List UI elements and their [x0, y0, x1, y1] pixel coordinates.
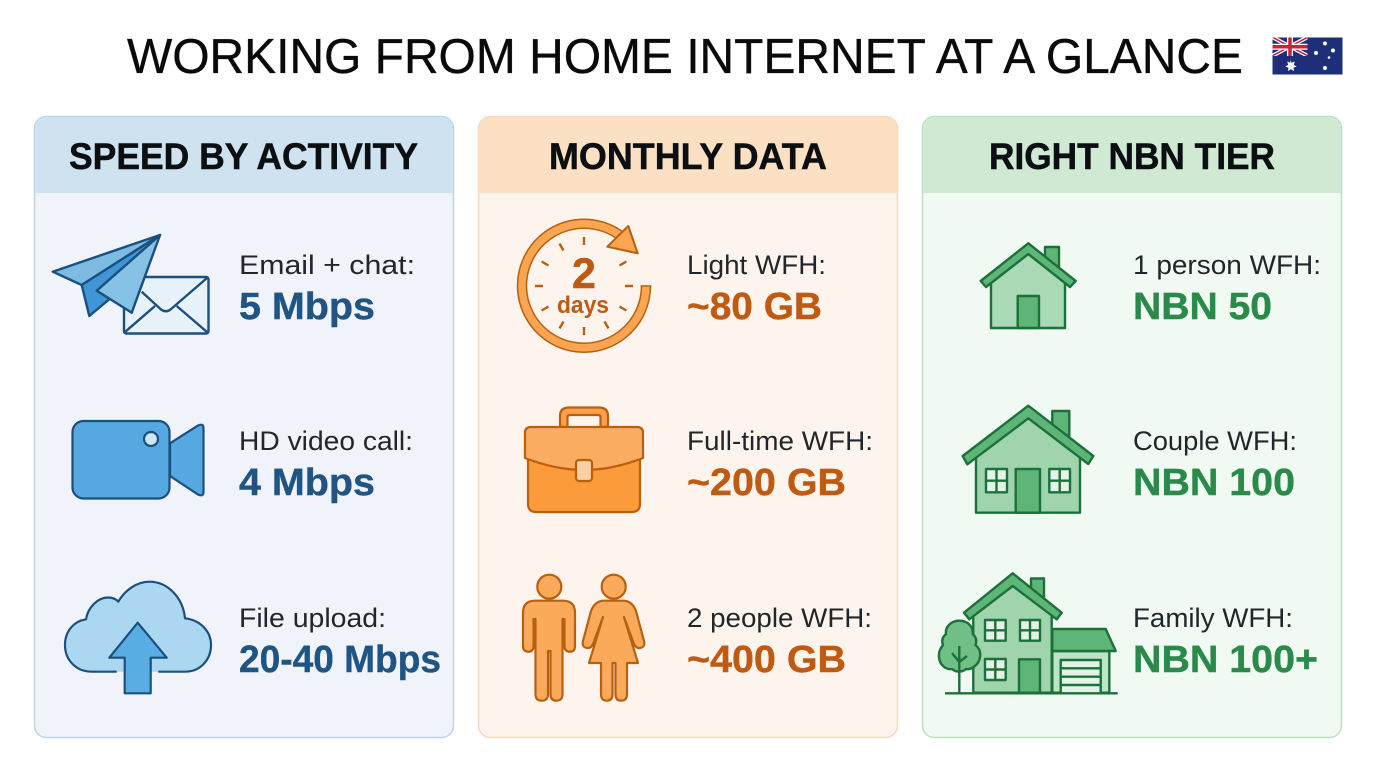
heading: MONTHLY DATA [549, 135, 827, 177]
icon: two-day clock: days [557, 292, 609, 319]
panel: right NBN tier [922, 116, 1342, 738]
value: ~400 GB: ~400 GB [687, 639, 846, 681]
heading: RIGHT NBN TIER [989, 135, 1275, 177]
text: 2 people WFH: 2 people WFH: [687, 603, 872, 633]
icon: medium house [963, 406, 1093, 513]
icon: two people [523, 575, 644, 701]
icon: two-day clock [522, 224, 652, 348]
value: 5 Mbps: 5 Mbps [239, 286, 375, 328]
header band [35, 117, 453, 193]
icon: two-day clock: 2 [572, 250, 596, 298]
title: WORKING FROM HOME INTERNET AT A GLANCE [127, 30, 1243, 84]
text: email and chat: Email + chat: [239, 250, 415, 280]
panel background [478, 116, 898, 738]
value: NBN 50: NBN 50 [1133, 286, 1272, 328]
icon: paper plane and envelope [53, 235, 209, 334]
heading: SPEED BY ACTIVITY [69, 135, 418, 177]
panel background [922, 116, 1342, 738]
icon: video camera [72, 421, 204, 498]
text: family WFH: Family WFH: [1133, 603, 1293, 633]
icon: small house [981, 243, 1076, 328]
header band [923, 117, 1341, 193]
panel: monthly data [478, 116, 898, 738]
icon: cloud upload [65, 582, 211, 693]
value: NBN 100+: NBN 100+ [1133, 639, 1318, 681]
value: ~200 GB: ~200 GB [687, 462, 846, 504]
header band [479, 117, 897, 193]
text: file upload: File upload: [239, 603, 386, 633]
text: 1 person WFH: 1 person WFH: [1133, 250, 1321, 280]
value: 20-40 Mbps: 20-40 Mbps [239, 639, 441, 681]
icon: family house with garage and tree [939, 573, 1118, 693]
icon: Australian flag [1272, 37, 1342, 74]
text: full-time WFH: Full-time WFH: [687, 426, 873, 456]
text: light WFH: Light WFH: [687, 250, 826, 280]
value: NBN 100: NBN 100 [1133, 462, 1295, 504]
text: HD video call: HD video call: [239, 426, 413, 456]
icon: briefcase [525, 408, 643, 512]
panel: speed by activity [34, 116, 454, 738]
panel background [34, 116, 454, 738]
value: ~80 GB: ~80 GB [687, 286, 822, 328]
value: 4 Mbps: 4 Mbps [239, 462, 375, 504]
text: couple WFH: Couple WFH: [1133, 426, 1297, 456]
